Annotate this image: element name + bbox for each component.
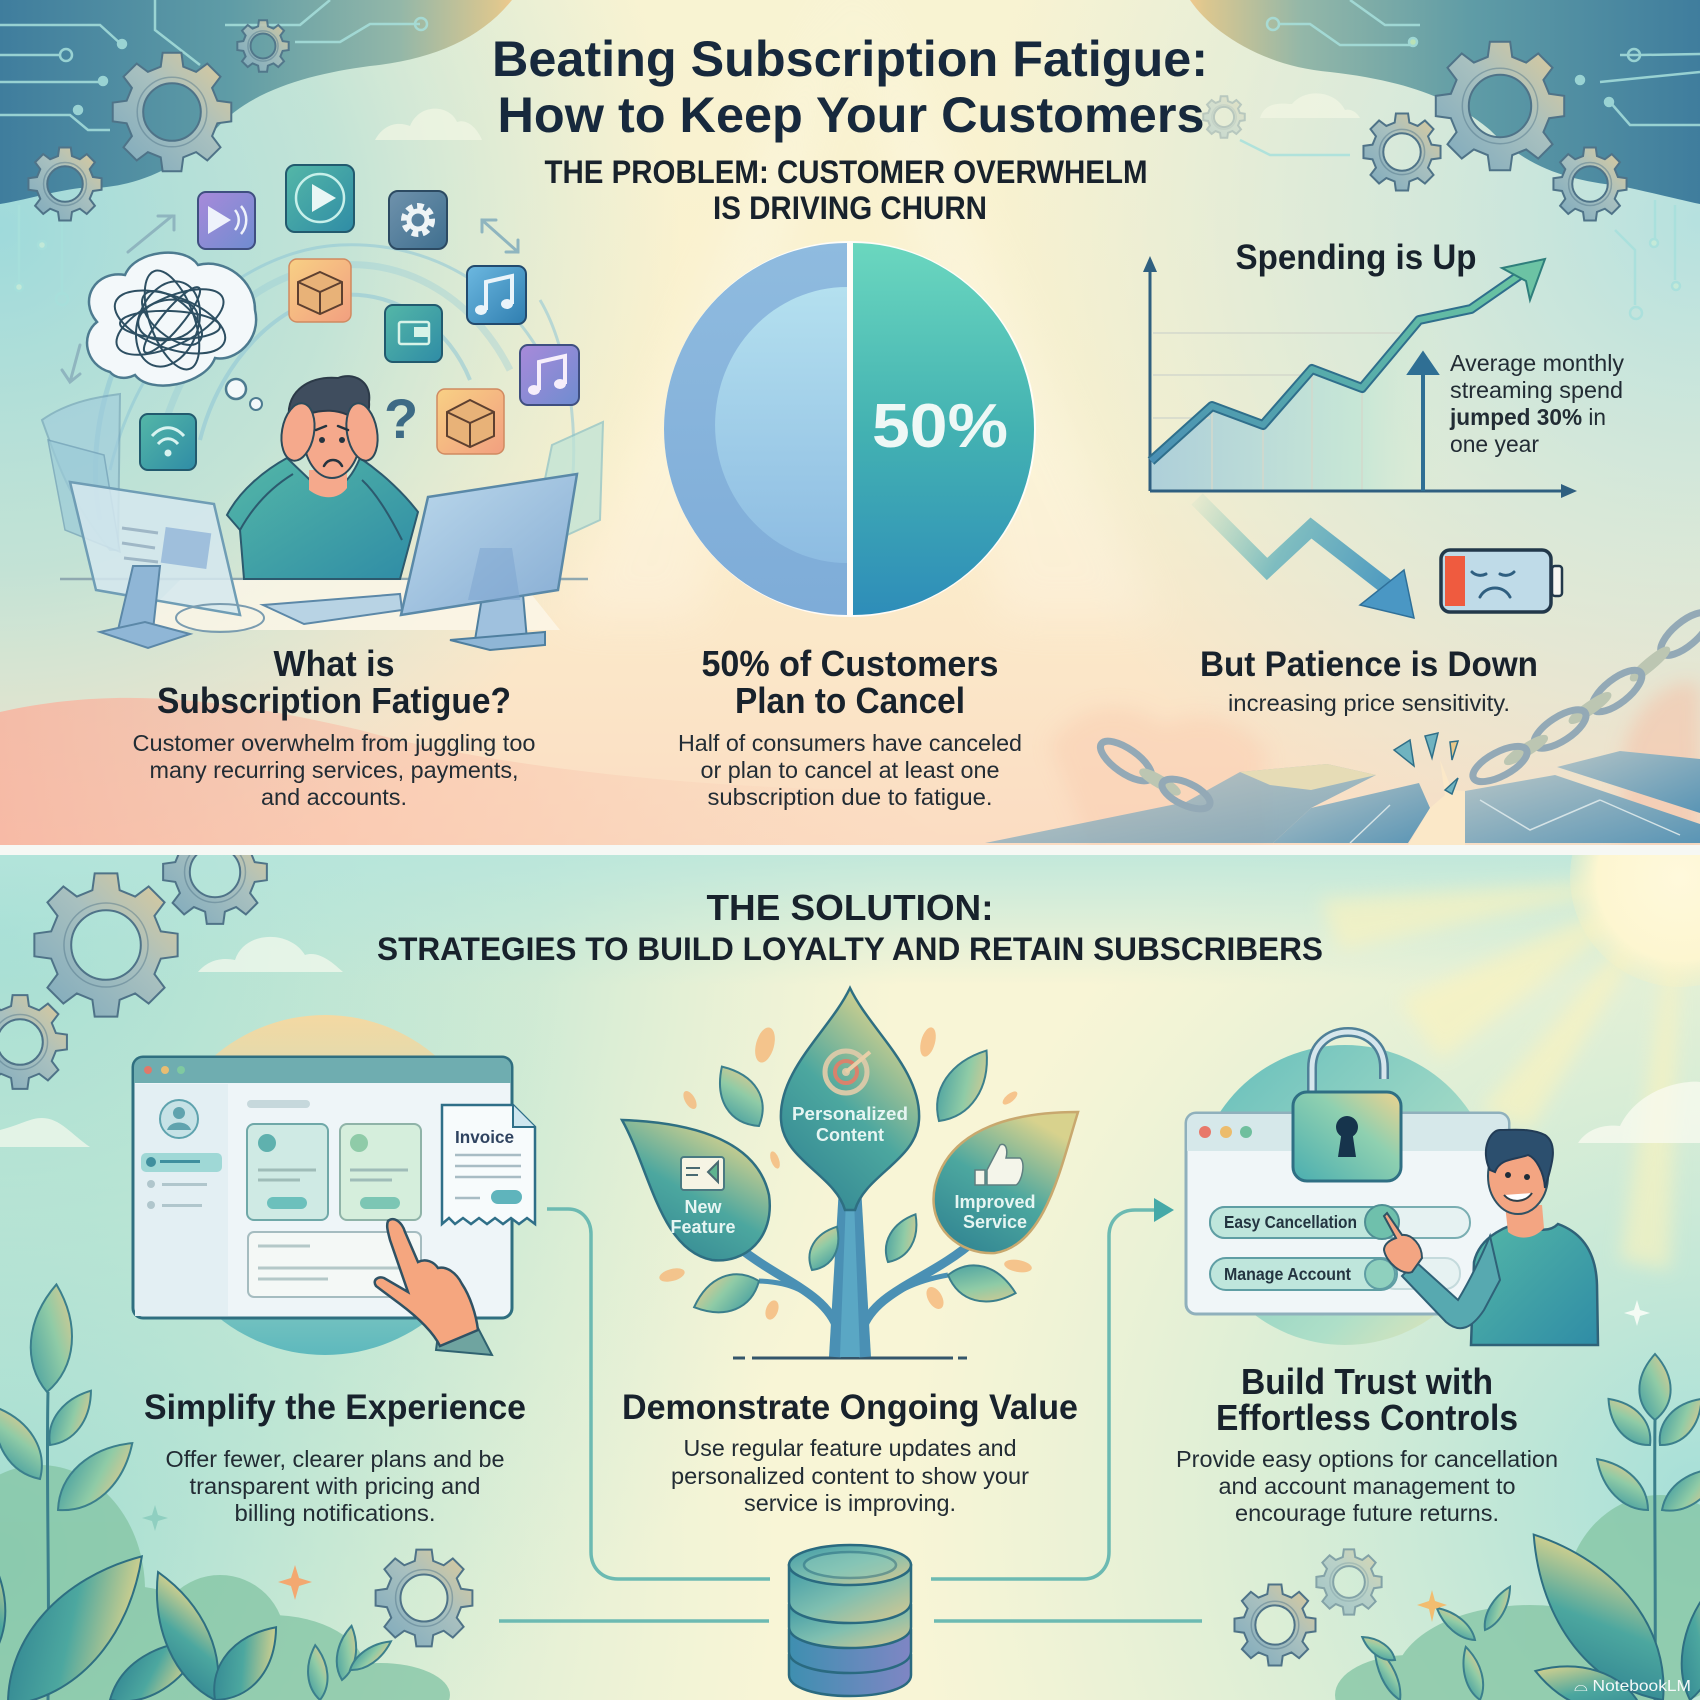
database cylinder (789, 1545, 911, 1696)
text: what is subscription fatigue: many recurring services, payments, (150, 757, 518, 783)
invoice document: Invoice (455, 1127, 514, 1147)
monitor left (70, 482, 264, 648)
solution heading (377, 887, 1323, 967)
top panel background (0, 0, 1700, 845)
tree trunk core (840, 1170, 860, 1357)
plan card one (247, 1124, 328, 1220)
text: patience is down: increasing price sensitivity. (1228, 690, 1510, 716)
text: build trust: and account management to (1218, 1473, 1516, 1499)
text: 50 percent plan to cancel: Plan to Cancel (735, 680, 965, 721)
person (227, 376, 418, 579)
illustration: value tree (622, 988, 1078, 1358)
person with controls (1384, 1130, 1598, 1345)
circuit lines right (1240, 0, 1700, 319)
stem left (47, 1392, 49, 1700)
gear: left clipped (0, 995, 67, 1089)
text: 50 percent plan to cancel: 50% of Customers (702, 643, 998, 684)
text: what is subscription fatigue: and accounts. (261, 784, 407, 810)
illustration: simplified app window (133, 1057, 512, 1318)
chart axes (1143, 256, 1577, 498)
icon: open padlock (1293, 1032, 1401, 1181)
clouds (0, 937, 1700, 1147)
text: what is subscription fatigue (132, 643, 536, 810)
connector left (547, 1209, 770, 1579)
illustration: overwhelmed person at desk (42, 165, 603, 650)
window title bar (134, 1058, 511, 1083)
icon: music blue (467, 266, 526, 324)
settings title bar (1187, 1114, 1508, 1151)
easy cancellation toggle (1210, 1205, 1470, 1239)
top-right corner blob (1190, 0, 1700, 204)
text: build trust: Build Trust with (1241, 1361, 1493, 1402)
text: simplify the experience: transparent with pricing and (190, 1473, 480, 1499)
leaf: new feature: New (684, 1197, 723, 1217)
gear: top-right small (1553, 147, 1627, 221)
bushes left (0, 1465, 450, 1700)
solution heading: STRATEGIES TO BUILD LOYALTY AND RETAIN SUBSCRIBERS (377, 931, 1323, 967)
icon: box (289, 259, 351, 322)
gear: bottom right (1234, 1584, 1316, 1666)
leaf: new feature (622, 1120, 770, 1260)
connector lower right (934, 1619, 1202, 1623)
spending note: Average monthly (1450, 350, 1624, 376)
spending note: one year (1450, 431, 1539, 457)
sparkle left (278, 1565, 312, 1600)
stem right (1653, 1420, 1657, 1700)
keyboard (263, 594, 402, 624)
icon: pointing hand (375, 1219, 492, 1355)
text: simplify the experience (144, 1388, 526, 1526)
text: patience is down: But Patience is Down (1200, 645, 1538, 684)
text: 50 percent plan to cancel (678, 643, 1022, 810)
text: build trust (1176, 1361, 1558, 1526)
panel: the problem (0, 0, 1700, 845)
icon: box large (437, 389, 504, 454)
patience down arrow (1197, 499, 1414, 618)
solution heading: THE SOLUTION: (706, 887, 994, 928)
gear: top-left tiny (237, 20, 289, 72)
icon: play (286, 165, 354, 232)
sparkle white (1624, 1300, 1650, 1326)
title (492, 31, 1208, 143)
top-left corner blob (0, 0, 512, 204)
leaf: personalized content (781, 988, 919, 1210)
gear: faint near title (1203, 96, 1245, 138)
sparkle faint (142, 1505, 168, 1531)
panel: the solution (0, 767, 1700, 1700)
manage account toggle (1210, 1258, 1460, 1290)
text: what is subscription fatigue: What is (274, 643, 394, 684)
title: Beating Subscription Fatigue: (492, 31, 1208, 87)
sun (1570, 767, 1700, 987)
pie right half (853, 243, 1034, 615)
chart grid (1153, 333, 1400, 491)
desk (60, 579, 588, 630)
gear: large left (34, 873, 178, 1017)
sparkle right (1417, 1590, 1447, 1622)
problem heading: THE PROBLEM: CUSTOMER OVERWHELM (544, 154, 1148, 190)
floating screen right (530, 422, 603, 552)
question mark: ? (384, 387, 418, 450)
window sidebar (135, 1084, 228, 1316)
leaf: new feature: Feature (670, 1217, 736, 1237)
floating screen panel left (48, 440, 120, 552)
circuit lines left (0, 0, 427, 305)
invoice document (442, 1105, 535, 1224)
small leaves (688, 1040, 1020, 1323)
text: build trust: Provide easy options for cancellation (1176, 1446, 1558, 1472)
sun rays (1320, 877, 1680, 1270)
text: 50 percent plan to cancel: Half of consumers have canceled (678, 730, 1022, 756)
thought cloud (87, 253, 262, 410)
text: demonstrate ongoing value: Demonstrate Ongoing Value (622, 1388, 1078, 1427)
leaf: personalized content: Personalized (792, 1104, 908, 1124)
broken chain right (1468, 606, 1700, 789)
icon: wallet (385, 305, 442, 362)
spending line chart (1143, 256, 1577, 498)
gear: top-right large (1436, 42, 1564, 170)
manage account toggle: Manage Account (1224, 1264, 1351, 1284)
pie chart 50% (664, 241, 1036, 617)
text: build trust: Effortless Controls (1216, 1397, 1518, 1438)
pie value label: 50% (872, 392, 1008, 461)
broken ground rocks (985, 751, 1700, 845)
text: demonstrate ongoing value (622, 1388, 1078, 1516)
plants bottom-left (0, 1283, 450, 1700)
orange petals (658, 1025, 1033, 1321)
plan card two (340, 1124, 421, 1220)
spending heading: Spending is Up (1236, 238, 1476, 277)
chart trend line (1151, 268, 1530, 461)
spending note (1449, 350, 1624, 457)
title: How to Keep Your Customers (498, 87, 1204, 143)
clouds (375, 93, 1360, 140)
vertical jump arrow (1410, 354, 1436, 491)
problem heading: IS DRIVING CHURN (713, 190, 987, 226)
backdrop circle right (1195, 1045, 1495, 1345)
floating screen left (42, 394, 120, 550)
text: simplify the experience: Simplify the Experience (144, 1388, 526, 1427)
leaf cluster left (0, 1283, 395, 1700)
leaf: improved service: Improved (954, 1192, 1036, 1212)
plan header bar (247, 1100, 310, 1108)
icon: audio (198, 192, 255, 249)
icon: settings (389, 191, 447, 249)
text: build trust: encourage future returns. (1235, 1500, 1499, 1526)
problem heading (544, 160, 1146, 220)
text: what is subscription fatigue: Subscription Fatigue? (157, 680, 511, 721)
pie inner highlight (715, 287, 847, 563)
chart arrow head (1502, 259, 1545, 300)
easy cancellation toggle: Easy Cancellation (1224, 1212, 1357, 1232)
swirl arcs (94, 243, 575, 474)
gear: top-left large (113, 53, 231, 171)
small arrows around icons (62, 216, 518, 382)
icon: low battery (1441, 550, 1562, 612)
chain break sparks (1394, 733, 1458, 794)
chart trend line inner (1151, 268, 1530, 461)
gear: top-left small (28, 147, 102, 221)
broken chain left (1095, 734, 1214, 815)
plants bottom-right (1335, 1300, 1700, 1700)
text: demonstrate ongoing value: service is improving. (744, 1490, 956, 1516)
text: simplify the experience: Offer fewer, clearer plans and be (166, 1446, 505, 1472)
tree ground line (733, 1356, 967, 1360)
summary panel (248, 1232, 421, 1297)
icon: wifi (140, 414, 196, 470)
text: 50 percent plan to cancel: or plan to cancel at least one (700, 757, 1000, 783)
gear: top-right mid (1363, 113, 1441, 191)
leaf: improved service: Service (963, 1212, 1027, 1232)
gear: bottom right light (1316, 1549, 1382, 1615)
watermark: ⌓ NotebookLM (1574, 1678, 1691, 1695)
text: what is subscription fatigue: Customer overwhelm from juggling too (132, 730, 536, 756)
connector right with arrow (931, 1198, 1174, 1579)
text: demonstrate ongoing value: personalized content to show your (671, 1463, 1029, 1489)
gear: top clipped (163, 820, 267, 924)
text: patience is down (1200, 645, 1538, 716)
text: simplify the experience: billing notifications. (234, 1500, 436, 1526)
backdrop circle left (155, 1015, 495, 1355)
spending note: jumped 30% in (1449, 404, 1606, 430)
text: demonstrate ongoing value: Use regular feature updates and (684, 1435, 1016, 1461)
pie left half (664, 243, 847, 615)
monitor right (401, 474, 577, 650)
illustration: settings window (1186, 1113, 1509, 1314)
bottom panel background (0, 855, 1700, 1700)
gear: bottom left (376, 1550, 472, 1646)
leaf: personalized content: Content (816, 1125, 884, 1145)
leaf: improved service (934, 1112, 1078, 1253)
leaf cluster right (1358, 1354, 1700, 1700)
tree trunk and branches (730, 1170, 975, 1357)
text: 50 percent plan to cancel: subscription due to fatigue. (708, 784, 992, 810)
icon: music purple (520, 345, 579, 405)
spending note: streaming spend (1450, 377, 1623, 403)
bushes right (1335, 1495, 1700, 1700)
connector lower left (499, 1619, 769, 1623)
chart area (1151, 315, 1450, 491)
